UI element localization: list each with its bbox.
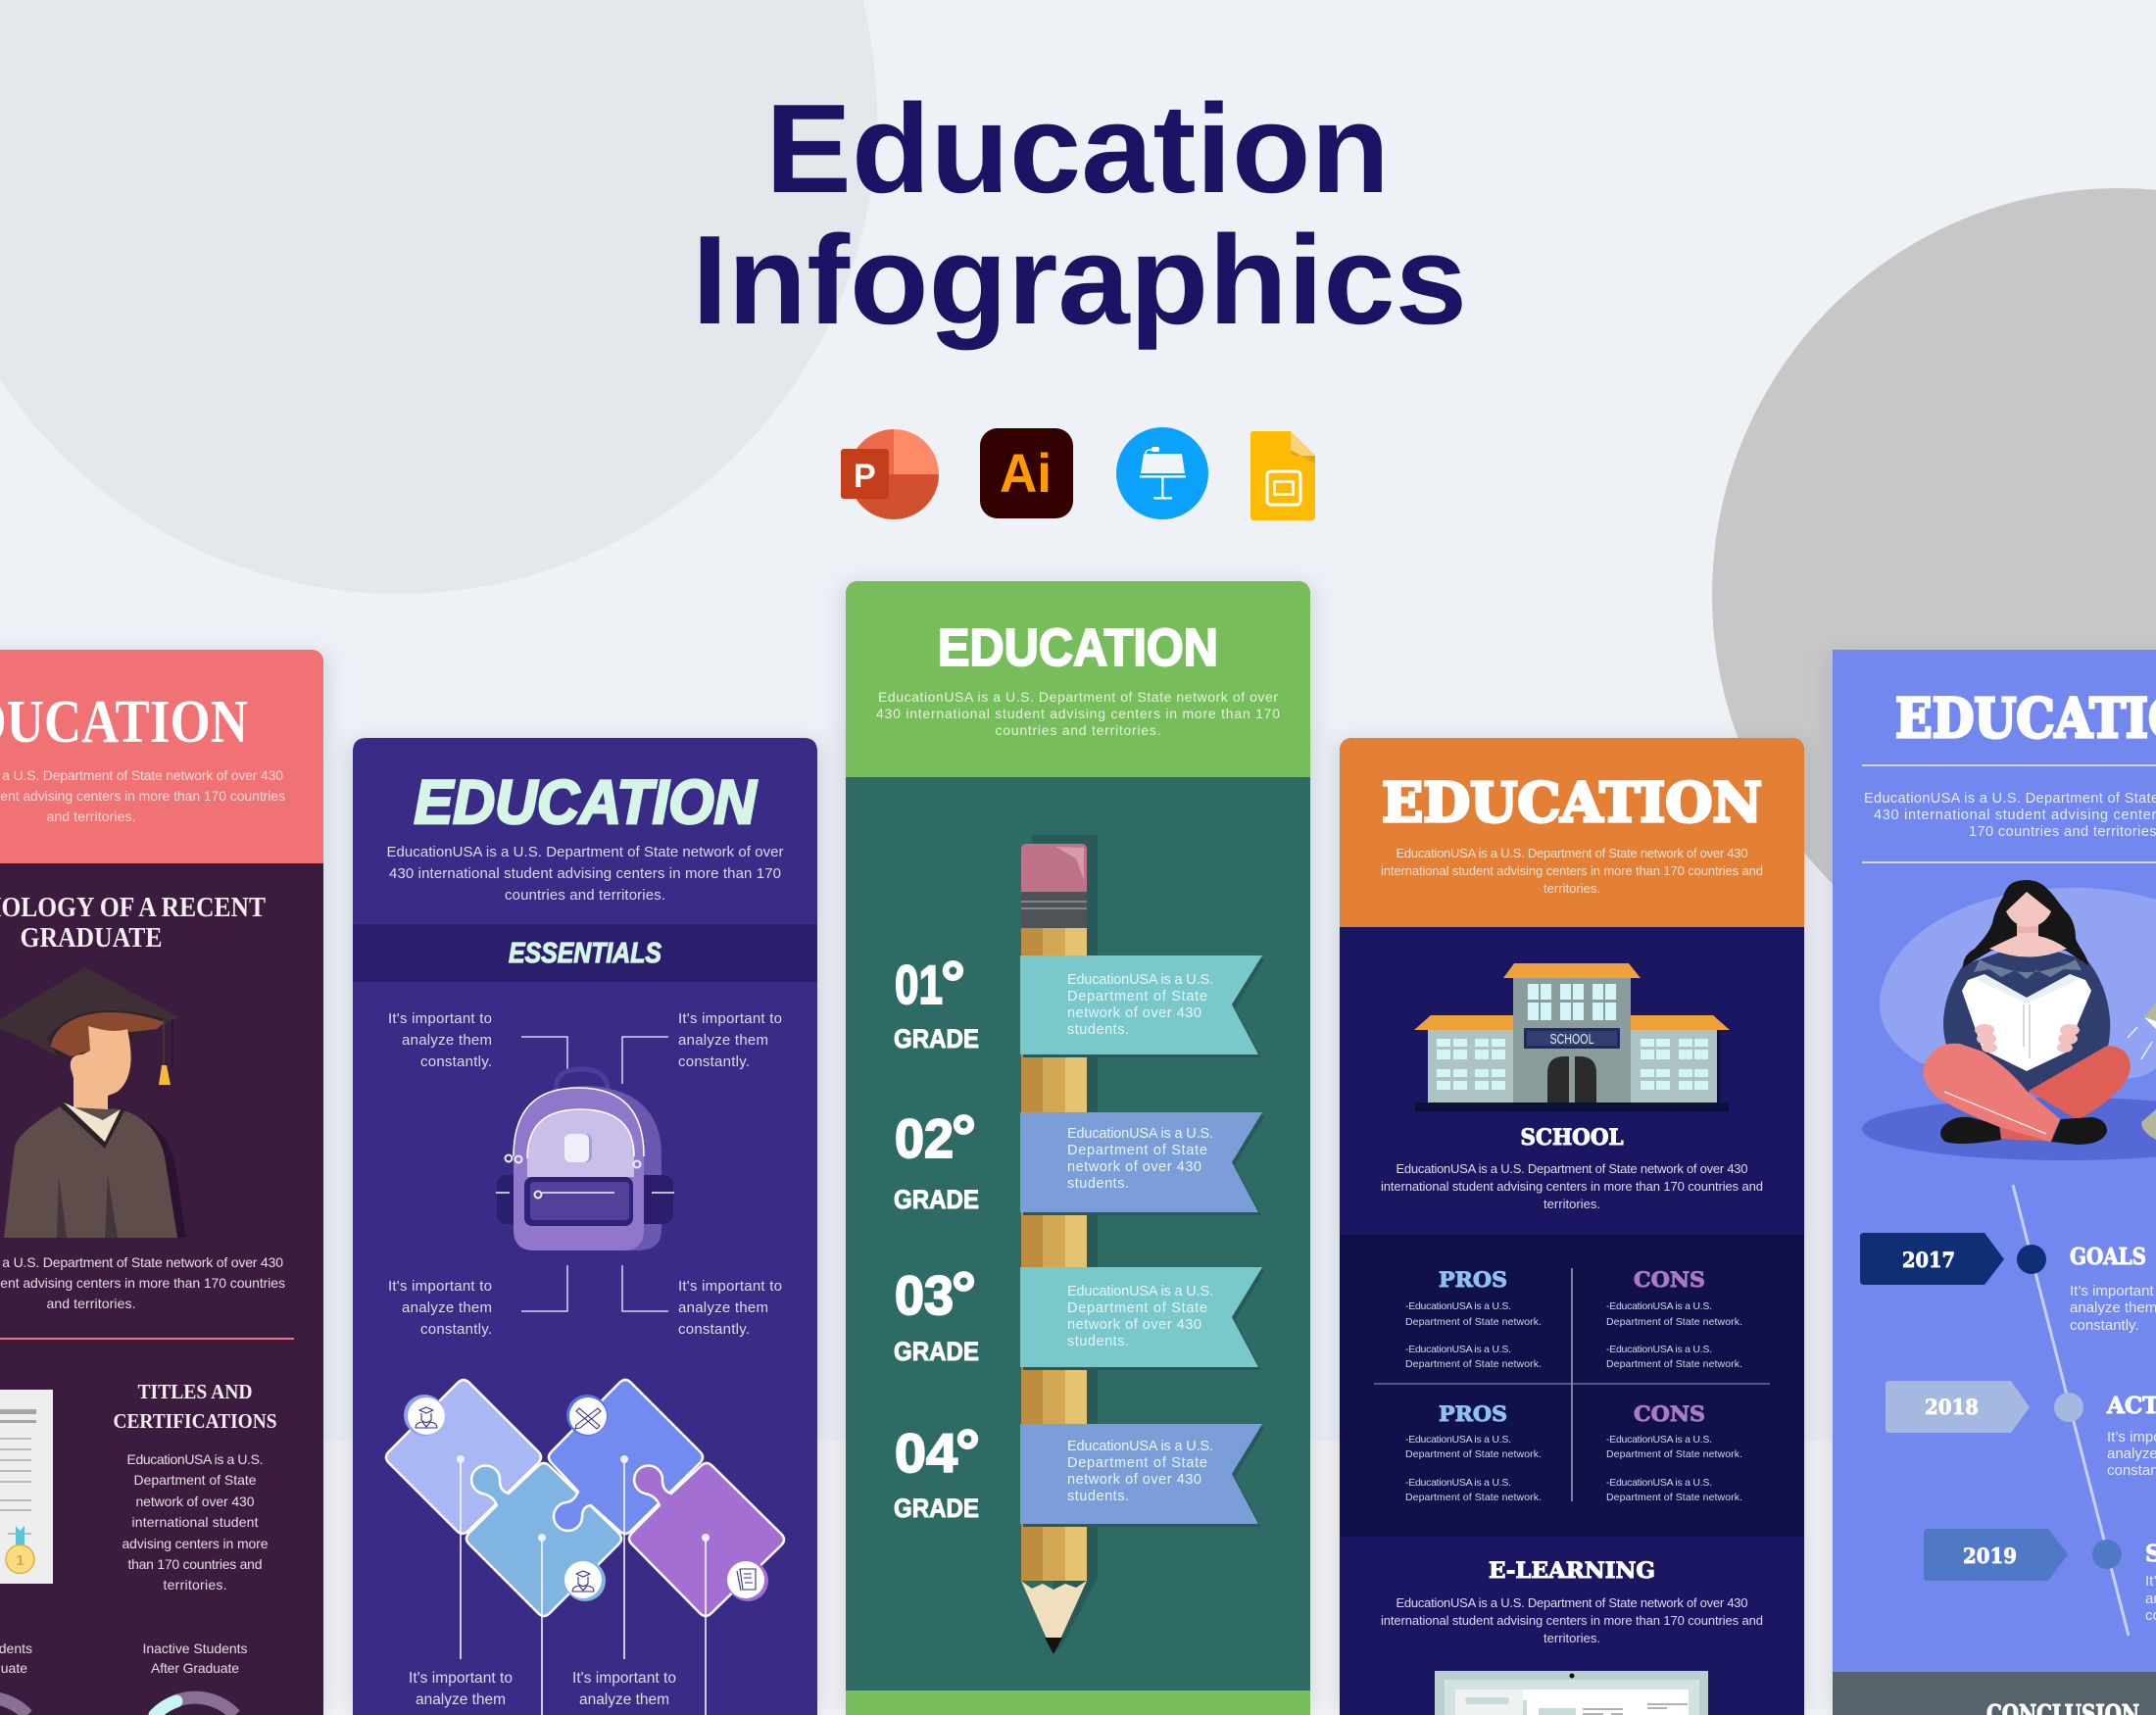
text block: network of over 430: [135, 1494, 255, 1509]
illustration: school building: [1414, 963, 1730, 1111]
callouts: analyze them: [402, 1032, 492, 1049]
school text: [1381, 1161, 1763, 1211]
section heading: [0, 892, 266, 954]
school text: territories.: [1544, 1197, 1600, 1211]
callouts: constantly.: [420, 1321, 492, 1338]
pros and cons panel: Department of State network.: [1405, 1358, 1542, 1370]
callouts: It's important to: [678, 1010, 782, 1027]
intro text: [1864, 791, 2156, 840]
heading: EDUCATION: [1382, 770, 1762, 834]
milestone 2019: [1924, 1529, 2156, 1624]
ribbon banners: EducationUSA is a U.S.: [1067, 1284, 1213, 1299]
intro text: EducationUSA is a U.S. Department of State network of over 430: [1396, 846, 1748, 860]
icon: PowerPoint: [841, 429, 939, 519]
intro text: [1381, 846, 1763, 896]
title: Education: [765, 78, 1390, 220]
e-learning heading: E-LEARNING: [1489, 1558, 1655, 1584]
milestone 2019: 2019: [1963, 1544, 2017, 1568]
timeline: [1860, 1185, 2156, 1636]
ribbon banners: EducationUSA is a U.S.: [1067, 1126, 1213, 1142]
header text: [0, 767, 285, 824]
callouts: constantly.: [678, 1321, 750, 1338]
puzzle captions: It's important to: [409, 1670, 513, 1687]
puzzle captions: It's important to: [572, 1670, 676, 1687]
grade numbers: °: [956, 1418, 980, 1486]
grade numbers: °: [941, 950, 965, 1017]
pros and cons panel: CONS: [1634, 1401, 1705, 1426]
ribbon banners: network of over 430: [1067, 1005, 1201, 1021]
section heading: TITLES AND: [137, 1380, 253, 1403]
title: Infographics: [692, 210, 1467, 351]
puzzle piece 4: [629, 1463, 784, 1616]
puzzle captions: analyze them: [579, 1691, 669, 1708]
milestone 2017: 2017: [1902, 1248, 1955, 1272]
grade numbers: 01: [895, 954, 943, 1015]
puzzle piece 1: [386, 1380, 541, 1534]
callouts: It's important to: [388, 1278, 492, 1295]
intro text: EducationUSA is a U.S. Department of State network of over: [878, 689, 1278, 705]
panel: green grade card: [846, 581, 1310, 1715]
milestone 2017: [1860, 1233, 2156, 1334]
illustration: certificate: [0, 1390, 53, 1584]
school text: EducationUSA is a U.S. Department of State network of over 430: [1396, 1161, 1748, 1176]
section heading: [114, 1380, 276, 1433]
grade numbers: GRADE: [894, 1494, 979, 1523]
e-learning text: EducationUSA is a U.S. Department of State network of over 430: [1396, 1595, 1748, 1610]
grade numbers: 04: [895, 1422, 957, 1484]
text block: advising centers in more: [122, 1536, 269, 1551]
ribbon banners: students.: [1067, 1334, 1129, 1349]
intro text: 170 countries and territories.: [1969, 824, 2156, 840]
pros and cons panel: [1340, 1235, 1804, 1537]
pros and cons panel: -EducationUSA is a U.S.: [1606, 1434, 1712, 1446]
body text: [0, 1254, 285, 1311]
pros and cons panel: Department of State network.: [1405, 1448, 1542, 1460]
ribbon banners: network of over 430: [1067, 1472, 1201, 1488]
callouts: It's important to: [678, 1278, 782, 1295]
pros and cons panel: -EducationUSA is a U.S.: [1405, 1344, 1511, 1355]
donut charts: [0, 1697, 235, 1715]
software icons row: [841, 427, 1315, 520]
pros and cons panel: -EducationUSA is a U.S.: [1606, 1344, 1712, 1355]
ribbon banners: students.: [1067, 1022, 1129, 1038]
donut labels: [0, 1641, 247, 1676]
title: [692, 78, 1467, 351]
ribbon banners: students.: [1067, 1176, 1129, 1192]
ribbon banners: students.: [1067, 1489, 1129, 1504]
ribbon banners: EducationUSA is a U.S.: [1067, 1439, 1213, 1454]
card shadows: [0, 585, 2156, 1715]
text block: Department of State: [133, 1472, 257, 1488]
puzzle captions: [409, 1670, 676, 1708]
callouts: constantly.: [678, 1054, 750, 1070]
intro text: territories.: [1544, 881, 1600, 896]
intro text: EducationUSA is a U.S. Department of State network of over: [386, 844, 784, 860]
ribbon banners: network of over 430: [1067, 1317, 1201, 1333]
pros and cons panel: CONS: [1634, 1267, 1705, 1292]
ribbon banners: Department of State: [1067, 989, 1207, 1004]
illustration: school building: SCHOOL: [1550, 1031, 1593, 1048]
pros and cons panel: PROS: [1439, 1267, 1507, 1292]
illustration: laptop: [1435, 1671, 1708, 1715]
school heading: SCHOOL: [1521, 1125, 1623, 1151]
text block: than 170 countries and: [127, 1556, 263, 1572]
callouts: constantly.: [420, 1054, 492, 1070]
pros and cons panel: -EducationUSA is a U.S.: [1405, 1477, 1511, 1489]
donut labels: After Graduate: [151, 1660, 239, 1676]
milestone 2017: constantly.: [2070, 1317, 2139, 1334]
intro text: [386, 844, 784, 904]
section heading: CERTIFICATIONS: [114, 1409, 276, 1433]
pros and cons panel: -EducationUSA is a U.S.: [1405, 1434, 1511, 1446]
text block: [122, 1451, 269, 1592]
illustration: woman reading: [1862, 880, 2156, 1160]
essentials band: ESSENTIALS: [509, 938, 662, 969]
callouts: [388, 1010, 782, 1338]
e-learning text: [1381, 1595, 1763, 1645]
puzzle piece 2: [466, 1463, 621, 1616]
essentials band: [353, 924, 817, 982]
ribbon banners: Department of State: [1067, 1455, 1207, 1471]
icon: Illustrator: [980, 428, 1073, 518]
header text: and territories.: [47, 808, 135, 824]
intro text: countries and territories.: [996, 722, 1160, 738]
ribbon banners: Department of State: [1067, 1300, 1207, 1316]
donut labels: Inactive Students: [143, 1641, 247, 1656]
ribbon banners: network of over 430: [1067, 1159, 1201, 1175]
intro text: 430 international student advising centers in more than 170: [876, 706, 1280, 721]
text block: territories.: [163, 1577, 227, 1592]
puzzle piece 3: [549, 1380, 703, 1534]
icon: PowerPoint: P: [854, 458, 876, 495]
icon: Keynote: [1116, 427, 1208, 519]
icon: backpack: [496, 1069, 674, 1250]
heading: EDUCATION: [414, 768, 758, 837]
pros and cons panel: Department of State network.: [1405, 1492, 1542, 1503]
pros and cons panel: PROS: [1439, 1401, 1507, 1426]
grade numbers: [894, 950, 980, 1523]
grade numbers: °: [952, 1260, 976, 1328]
grade numbers: °: [952, 1103, 976, 1171]
header: [0, 650, 323, 863]
grade numbers: GRADE: [894, 1337, 979, 1366]
pros and cons panel: -EducationUSA is a U.S.: [1405, 1300, 1511, 1312]
heading: EDUCATION: [938, 618, 1218, 677]
grade numbers: 02: [895, 1107, 954, 1169]
pros and cons panel: Department of State network.: [1606, 1316, 1742, 1328]
intro text: international student advising centers in more than 170 countries and: [1381, 863, 1763, 878]
illustration: certificate: 1: [16, 1552, 24, 1569]
puzzle diagram: [386, 1380, 784, 1715]
grade numbers: 03: [895, 1264, 954, 1326]
body text: and territories.: [47, 1296, 135, 1311]
text block: international student: [131, 1514, 259, 1530]
pointer lines: [457, 1455, 710, 1715]
icon: Google Slides: [1250, 431, 1315, 520]
pros and cons panel: -EducationUSA is a U.S.: [1606, 1300, 1712, 1312]
ribbon banners: [1020, 956, 1265, 1527]
icon badges: [404, 1395, 768, 1601]
panel: pink graduate card: [0, 650, 323, 1715]
e-learning text: international student advising centers in more than 170 countries and: [1381, 1613, 1763, 1628]
milestone 2017: GOALS: [2070, 1244, 2146, 1270]
pros and cons panel: Department of State network.: [1606, 1448, 1742, 1460]
pros and cons panel: -EducationUSA is a U.S.: [1606, 1477, 1712, 1489]
milestone 2018: [1886, 1381, 2156, 1479]
illustration: graduate: [0, 967, 186, 1238]
illustration: pencil: [1021, 835, 1098, 1654]
grade numbers: GRADE: [894, 1185, 979, 1214]
section heading: GRADUATE: [20, 922, 163, 954]
callouts: analyze them: [402, 1299, 492, 1316]
header: [846, 581, 1310, 777]
intro text: countries and territories.: [505, 887, 665, 904]
header: [1340, 738, 1804, 927]
intro text: 430 international student advising centers in more than 170: [389, 865, 781, 882]
milestone 2018: 2018: [1925, 1395, 1979, 1419]
pros and cons panel: Department of State network.: [1606, 1358, 1742, 1370]
pros and cons panel: Department of State network.: [1405, 1316, 1542, 1328]
grade numbers: GRADE: [894, 1024, 979, 1054]
panel: orange school card: [1340, 738, 1804, 1715]
panel: blue timeline card: [1833, 650, 2156, 1715]
ribbon banners: EducationUSA is a U.S.: [1067, 972, 1213, 988]
callouts: analyze them: [678, 1299, 768, 1316]
intro text: [876, 689, 1280, 738]
school text: international student advising centers in more than 170 countries and: [1381, 1179, 1763, 1194]
text block: EducationUSA is a U.S.: [127, 1451, 263, 1467]
puzzle captions: analyze them: [416, 1691, 506, 1708]
callouts: analyze them: [678, 1032, 768, 1049]
panel: purple essentials card: [353, 738, 817, 1715]
e-learning text: territories.: [1544, 1631, 1600, 1645]
ribbon banners: Department of State: [1067, 1143, 1207, 1158]
callouts: It's important to: [388, 1010, 492, 1027]
pros and cons panel: Department of State network.: [1606, 1492, 1742, 1503]
icon: Illustrator: Ai: [1000, 442, 1052, 504]
milestone 2017: analyze them: [2070, 1299, 2156, 1316]
